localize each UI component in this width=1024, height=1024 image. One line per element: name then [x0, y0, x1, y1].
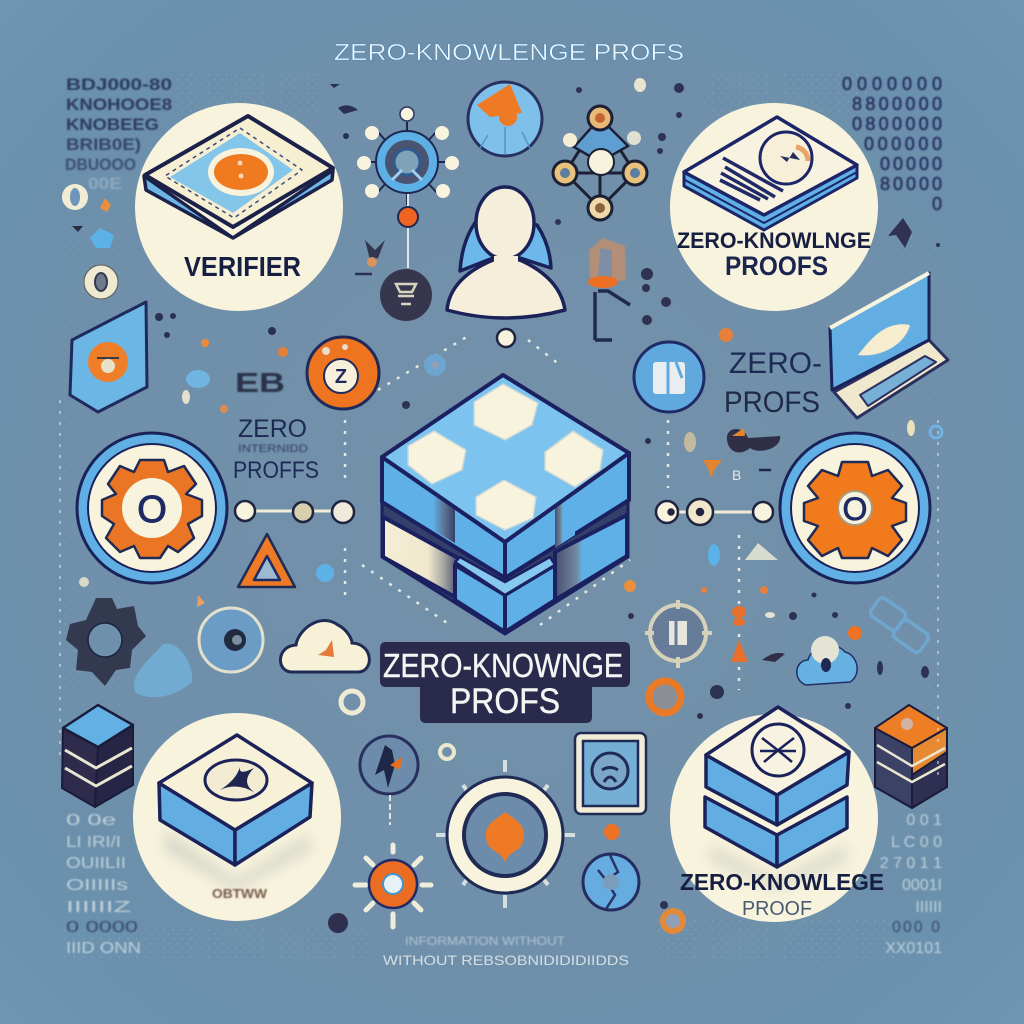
icon: laptop [830, 273, 948, 418]
icon: orange and blue emblem [468, 82, 542, 156]
binary text block: top left: 00E [88, 174, 122, 193]
label: proffs: PROFFS [233, 457, 319, 484]
icon: orange figure [588, 238, 630, 340]
binary text block: bottom left [66, 812, 141, 957]
binary text block: top left: BRIB0E) [66, 135, 141, 154]
bottom caption [383, 934, 629, 968]
icon: central person [447, 187, 565, 318]
binary text block: top left [65, 75, 172, 193]
icon: cream cloud [280, 621, 369, 672]
icon: isometric box [159, 735, 312, 865]
binary text block: bottom right: IIIIII [915, 899, 942, 916]
top layer left face [382, 457, 505, 578]
binary text block: top right [842, 74, 942, 214]
top layer right face [505, 453, 629, 578]
icon: orange dot right [848, 626, 862, 640]
banner text: zero-knownge: ZERO-KNOWNGE [383, 647, 623, 684]
icon: orange small dot [604, 824, 620, 840]
top layer shading right [555, 493, 575, 548]
binary text block: bottom left: OIIIIIs [66, 877, 128, 894]
icon: document stack [684, 117, 857, 230]
label: zero-knowledge: ZERO-KNOWLNGE [677, 228, 871, 253]
icon: orange gear [804, 462, 906, 558]
binary text block: top right: 00000 [880, 154, 942, 174]
icon: dark stack circle [380, 269, 432, 321]
binary text block: bottom right [880, 812, 942, 957]
binary text block: top left: DBUOOO [65, 155, 136, 174]
label: profs right: PROFS [724, 386, 820, 419]
binary text block: top right: 80000 [880, 174, 942, 194]
binary text block: top left: KNOHOOE8 [66, 95, 172, 114]
icon: orange cube right [875, 705, 947, 808]
icon: small orange ring lower [663, 911, 683, 931]
lower cream block [383, 517, 458, 597]
title: ZERO-KNOWLENGE PROFS [334, 39, 684, 65]
label: blurred line: INTERNIDD [238, 443, 308, 455]
icon: wheel with orange leaf [436, 760, 575, 908]
binary text block: bottom left: OUIILII [66, 855, 126, 872]
connector: hub to orange dot [407, 194, 409, 268]
label: proofs: PROOFS [725, 251, 828, 281]
icon: dark dot [328, 913, 348, 933]
decorative dots [62, 78, 942, 909]
icon: ring lens [199, 608, 263, 672]
panel: bottom right box stack [670, 707, 884, 922]
icon: hub wheel [357, 107, 459, 205]
dashed connectors [60, 335, 938, 780]
binary text block: bottom left: 0 0e [66, 812, 116, 829]
binary text block: bottom right: 000 0 [892, 919, 942, 936]
binary text block: bottom right: XX0101 [885, 940, 942, 957]
icon: small dark ring emblem [360, 736, 418, 794]
bottom caption: INFORMATION WITHOUT [405, 934, 566, 948]
icon: stacked boxes [705, 707, 849, 867]
connector: lower lines [389, 795, 391, 825]
icon: verifier book [144, 116, 333, 238]
icon: hexagon shield [70, 302, 147, 412]
panel: right gear circle: O [843, 491, 867, 527]
panel: left gear circle: O [137, 489, 167, 531]
binary text block: top left: BDJ000-80 [66, 75, 172, 94]
backing silhouette [382, 500, 628, 634]
icon: network nodes [553, 106, 647, 220]
binary text block: bottom left: IIID ONN [66, 940, 141, 957]
hex tiles [408, 384, 603, 530]
binary text block: bottom right: 0 0 1 [906, 812, 942, 829]
binary text block: top right: 0800000 [852, 114, 942, 134]
icon: orange z ball [307, 337, 379, 409]
icon: blue globe [583, 854, 639, 910]
panel: central stack [382, 375, 629, 634]
icon: chain links [869, 596, 930, 654]
icon: top node [497, 329, 515, 347]
binary text block: bottom right: L C 0 0 [891, 834, 942, 851]
banner text: profs: PROFS [450, 682, 560, 721]
binary text block: top left: KNOBEEG [66, 115, 159, 134]
icon: gear badge [645, 600, 712, 668]
binary text block: top right: 8800000 [852, 94, 942, 114]
icon: orange dot [398, 207, 418, 227]
binary text block: bottom right: 0001I [902, 877, 942, 894]
lower centre block right face [505, 565, 555, 632]
label: faded caption: OBTWW [212, 886, 268, 901]
binary text block: bottom left: IIIIIIZ [66, 899, 131, 916]
icon: orange z ball: Z [335, 366, 347, 388]
binary text block: top right: 0 [932, 194, 942, 214]
top layer shading left [433, 491, 455, 543]
icon: dark gear with blue blob [66, 598, 192, 697]
label: zero small: ZERO [238, 415, 307, 443]
panel: verifier [135, 103, 343, 311]
lower centre strip [455, 557, 555, 595]
icon: sun spokes [355, 845, 431, 927]
icon: blue cloud [797, 636, 857, 685]
connector: right chain [656, 499, 773, 525]
icon: dark cube left [62, 705, 133, 807]
label: faded proof: PROOF [742, 898, 812, 920]
panel: bottom left box [133, 713, 341, 921]
lower centre block left face [455, 565, 505, 632]
label: central dark banner [380, 642, 630, 723]
lower right block [555, 515, 627, 600]
icon: orange gear [102, 460, 202, 558]
icon: photo frame [575, 733, 646, 814]
connector: left chain [235, 501, 354, 523]
binary text block: top right: 000000 [864, 134, 942, 154]
label: zero dash: ZERO- [729, 347, 822, 380]
centre edge [504, 542, 506, 578]
icon: orange ring [649, 681, 681, 713]
icon: warning triangle [238, 534, 295, 587]
top face [382, 375, 629, 542]
panel: zero-knowledge proofs document [670, 103, 878, 311]
label: stray glyphs: EB [235, 367, 285, 398]
icon: cream ring lower [341, 691, 363, 713]
icon: blue badge [634, 342, 704, 412]
panel: right gear circle [780, 433, 930, 583]
label: verifier: VERIFIER [184, 251, 301, 282]
panel: left gear circle [77, 433, 227, 583]
bottom caption: WITHOUT REBSOBNIDIDIDIIDDS [383, 952, 629, 968]
icon: small ring [440, 745, 454, 759]
binary text block: top right: 0000000 [842, 74, 942, 94]
label: zero-knowledge: ZERO-KNOWLEGE [680, 869, 884, 895]
binary text block: bottom left: LI IRI/I [66, 834, 121, 851]
binary text block: bottom left: 0 0000 [66, 919, 138, 936]
binary text block: bottom right: 2 7 0 1 1 [880, 855, 942, 872]
decorative dots: B [732, 467, 741, 483]
